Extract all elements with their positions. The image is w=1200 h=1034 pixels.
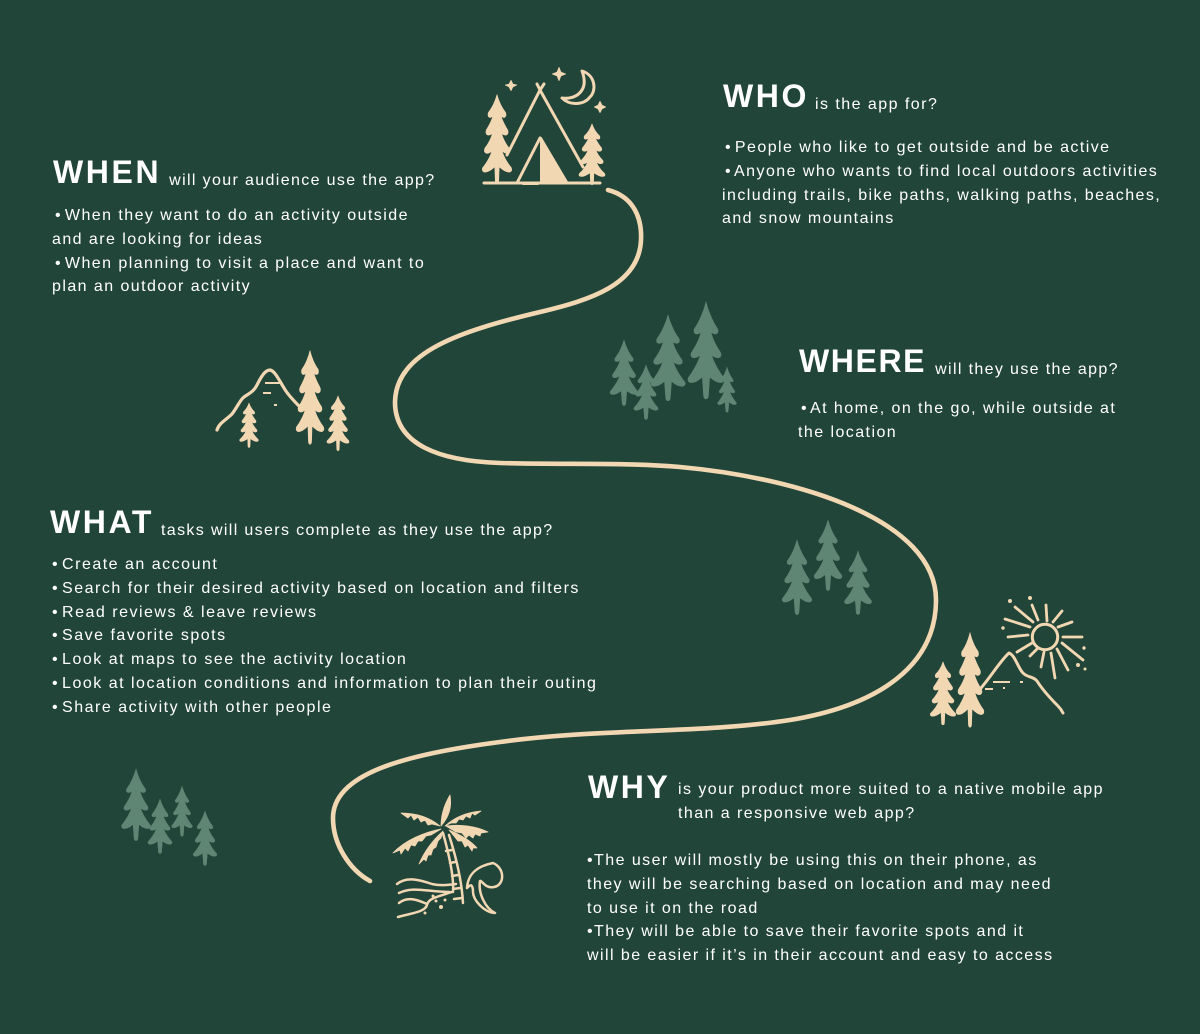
- subheading: why: is your product more suited to a native mobile app: [678, 781, 1104, 798]
- text: why: will be easier if it’s in their account and easy to access: [587, 947, 1054, 964]
- icon: palm tree and wave: [393, 795, 502, 917]
- text: why: •They will be able to save their favorite spots and it: [587, 923, 1024, 940]
- icon: green trees, bottom left: [122, 769, 217, 865]
- heading: why: WHY: [588, 769, 670, 805]
- heading: where: WHERE will they use the app?: [799, 343, 1119, 379]
- text: where: • At home, on the go, while outside at: [801, 400, 1116, 417]
- subheading: why: than a responsive web app?: [678, 805, 916, 822]
- text: what: • Share activity with other people: [52, 699, 332, 716]
- text: what: • Read reviews & leave reviews: [52, 604, 317, 621]
- text: what: • Look at maps to see the activity location: [52, 651, 407, 668]
- icon: green trees, where: [610, 302, 736, 419]
- wave: [467, 863, 502, 913]
- text: what: [52, 556, 597, 716]
- text: who: • People who like to get outside and be active: [725, 139, 1111, 156]
- subheading: why: [678, 781, 1104, 822]
- text: when: [52, 207, 425, 295]
- fronds: [393, 795, 488, 864]
- text: who: [722, 139, 1161, 227]
- text: where: the location: [798, 424, 897, 441]
- text: why: they will be searching based on location and may need: [587, 876, 1052, 893]
- text: what: • Search for their desired activity based on location and filters: [52, 580, 580, 597]
- heading: when: WHEN will your audience use the app?: [53, 154, 435, 190]
- text: who: and snow mountains: [722, 210, 895, 227]
- text: who: • Anyone who wants to find local outdoors activities: [725, 163, 1158, 180]
- icon: tent with moon and trees: [482, 67, 606, 185]
- text: when: plan an outdoor activity: [52, 278, 251, 295]
- text: who: including trails, bike paths, walking paths, beaches,: [722, 187, 1161, 204]
- text: why: to use it on the road: [587, 900, 759, 917]
- text: what: • Look at location conditions and information to plan their outing: [52, 675, 597, 692]
- text: what: • Save favorite spots: [52, 627, 227, 644]
- icon: mountain with pines: [217, 351, 349, 451]
- heading: what: WHAT tasks will users complete as they use the app?: [50, 504, 554, 540]
- text: where: [798, 400, 1116, 441]
- text: what: • Create an account: [52, 556, 218, 573]
- text: when: • When they want to do an activity outside: [55, 207, 409, 224]
- text: why: [587, 852, 1054, 964]
- text: when: • When planning to visit a place and want to: [55, 255, 425, 272]
- heading: who: WHO is the app for?: [723, 78, 938, 114]
- text: when: and are looking for ideas: [52, 231, 263, 248]
- icon: green trees, what: [782, 520, 872, 615]
- text: why: •The user will mostly be using this on their phone, as: [587, 852, 1038, 869]
- winding trail: [333, 190, 936, 881]
- icon: mountain with sun and pines: [930, 596, 1086, 727]
